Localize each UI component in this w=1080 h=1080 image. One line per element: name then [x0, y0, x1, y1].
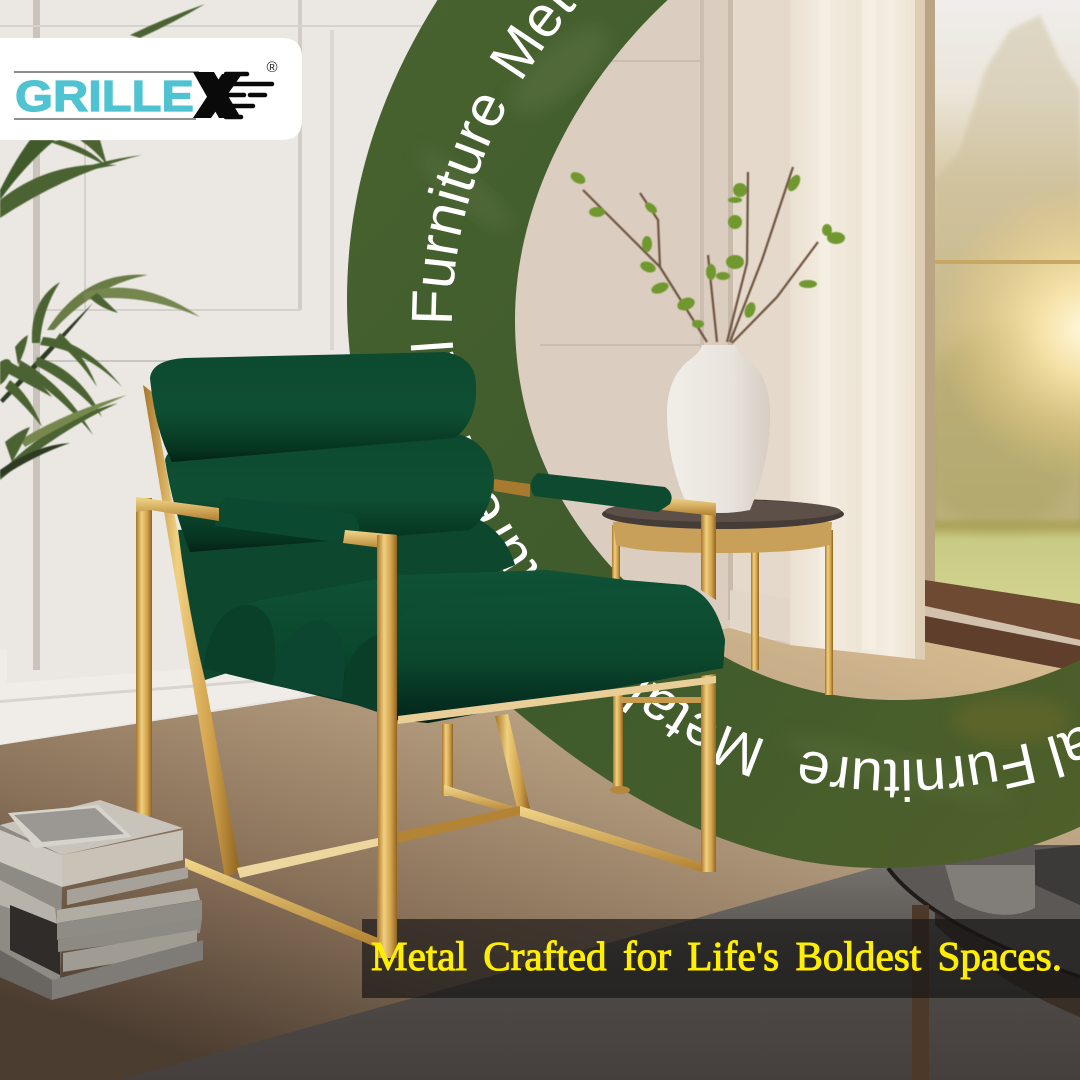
left armrest [215, 497, 359, 542]
dark tagline band [362, 919, 1080, 998]
logo card [0, 38, 302, 140]
logo rules [14, 71, 199, 120]
left arm [136, 497, 219, 521]
ribbon text: Furniture [480, 493, 606, 690]
vase branches [569, 167, 845, 343]
base bars [237, 838, 378, 878]
back slant bar [143, 385, 240, 878]
book pages and left sides [0, 825, 62, 1000]
middle roll cushion [165, 432, 494, 552]
book spines [62, 830, 183, 887]
logo wordmark: GRILLE [15, 72, 194, 121]
white vase [667, 345, 770, 513]
wooden floor [0, 628, 1080, 1080]
seat rolls [203, 570, 725, 723]
top book cover [0, 800, 183, 855]
palm plant [0, 4, 205, 480]
glass coffee table [888, 845, 1080, 1080]
ribbon text: Furniture [412, 96, 504, 321]
ribbon text: Furniture [800, 744, 1035, 802]
left back post [136, 498, 152, 816]
front arm and post [343, 530, 397, 550]
rear frame [398, 479, 716, 873]
armchair [136, 352, 725, 958]
lower roll cushion [178, 515, 515, 680]
tagline: Metal Crafted for Life's Boldest Spaces. [371, 933, 1062, 979]
curved green ribbon [347, 0, 1080, 868]
ribbon text: Metal [623, 682, 764, 777]
window with garden view [915, 0, 1080, 672]
under-seat rail [398, 676, 716, 724]
ribbon text: Metal [410, 342, 472, 440]
wall background [0, 0, 1080, 770]
side table [602, 499, 844, 794]
tablet [8, 805, 132, 848]
top roll cushion [150, 352, 476, 462]
right armrest [531, 473, 672, 512]
stack of books [0, 800, 203, 1000]
registered mark: ® [266, 59, 278, 76]
logo X mark [193, 72, 272, 118]
grey rug [120, 866, 1080, 1080]
ribbon text [410, 0, 1080, 802]
sheer curtain [790, 0, 925, 665]
